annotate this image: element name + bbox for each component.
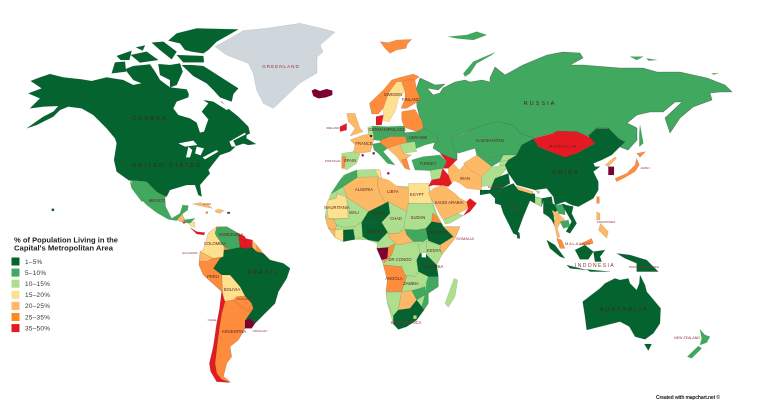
- country: Namibia: [386, 292, 402, 316]
- region: Central and South America: [52, 180, 290, 383]
- country: Cote d'Ivoire: [335, 229, 343, 242]
- country labels: CHILE: [208, 318, 216, 322]
- country labels: JAPAN: [640, 166, 650, 170]
- legend title: % of Population Living in the: [14, 236, 118, 244]
- country: Tanzania: [417, 253, 438, 277]
- region: Asia: [480, 57, 718, 238]
- country: Colombia: [200, 227, 224, 258]
- country: Svalbard: [380, 39, 412, 53]
- country labels: BRAZIL: [247, 270, 279, 276]
- country labels: UNITED STATES: [132, 163, 202, 169]
- country: Iran: [448, 163, 482, 190]
- country: Kenya: [427, 242, 442, 265]
- country labels: ALGERIA: [355, 187, 373, 192]
- country labels: FRANCE: [355, 141, 373, 146]
- country: Saudi Arabia: [428, 185, 468, 220]
- country: Madagascar: [445, 278, 458, 307]
- credit line: Created with mapchart.net ©: [656, 394, 720, 401]
- country: Liberia and Sierra Leone: [328, 228, 336, 238]
- country labels: UKRAINE: [409, 135, 428, 140]
- country: Yemen: [443, 213, 463, 224]
- country: Bhutan: [535, 190, 540, 194]
- country: Vietnam: [562, 204, 577, 233]
- country: Chad: [382, 202, 407, 233]
- country: Mali: [333, 197, 368, 227]
- country labels: EGYPT: [410, 192, 425, 197]
- country: Syria: [430, 168, 443, 180]
- Caribbean islands: [193, 203, 230, 214]
- country: Tajikistan: [499, 160, 508, 166]
- Sakhalin and Russian far-east islands: [630, 57, 718, 147]
- country: India: [495, 183, 553, 235]
- country: Algeria: [343, 177, 388, 212]
- country: Nepal: [517, 186, 533, 194]
- country: Turkmenistan: [463, 155, 492, 177]
- country: Nigeria: [362, 222, 388, 242]
- country: Japan: [615, 152, 646, 182]
- country: Bangladesh: [535, 197, 542, 207]
- Central American countries: [177, 214, 205, 235]
- Africa land base: [325, 169, 460, 329]
- country: Balkans: [387, 144, 412, 168]
- country: Togo and Benin: [353, 222, 363, 239]
- country: Paraguay: [233, 296, 252, 312]
- country labels: ARGENTINA: [222, 329, 246, 334]
- country labels: DR CONGO: [388, 257, 412, 262]
- country: Denmark: [376, 115, 383, 125]
- country: Uganda: [418, 242, 427, 253]
- country: Canada and United States: [27, 74, 256, 197]
- country: Indonesia: [547, 240, 610, 272]
- country: Baltics and Belarus: [402, 109, 423, 132]
- country labels: NIGERIA: [367, 229, 385, 234]
- country: Portugal: [342, 157, 346, 168]
- country: Senegal and Guinea: [325, 217, 337, 230]
- country: Romania: [400, 142, 417, 153]
- country labels: KENYA: [427, 248, 441, 253]
- water: Great Lakes and St Lawrence: [178, 133, 247, 159]
- country: Zimbabwe: [412, 287, 425, 300]
- Baja California: [130, 182, 144, 202]
- country labels: CHINA: [552, 170, 580, 176]
- legend entry 25-35%: 25–35%: [25, 314, 50, 321]
- country labels: PAKISTAN: [488, 185, 502, 189]
- country: Caucasus: [440, 153, 457, 168]
- country labels: INDONESIA: [575, 263, 615, 269]
- country labels: URUGUAY: [253, 329, 267, 333]
- country: Lesotho: [413, 315, 417, 319]
- country: Newfoundland: [233, 134, 247, 146]
- country: China: [505, 128, 625, 207]
- country labels: MALI: [349, 210, 359, 215]
- country labels: POLAND: [388, 127, 406, 132]
- countries: Central Europe: [380, 137, 407, 148]
- country: Finland: [401, 80, 421, 108]
- country: Ukraine: [404, 128, 438, 148]
- legend entry 5-10%: 5–10%: [25, 270, 46, 277]
- country: Benelux: [368, 126, 374, 140]
- country labels: SAUDI ARABIA: [434, 200, 464, 205]
- country: Spain: [342, 152, 360, 170]
- country: New Guinea: [617, 253, 658, 272]
- water: Hudson Bay: [173, 80, 230, 133]
- country: Zambia: [402, 272, 428, 292]
- country labels: PHILIPPINES: [597, 220, 615, 224]
- country labels: SWEDEN: [384, 92, 402, 97]
- legend entry 10-15%: 10–15%: [25, 281, 50, 288]
- country labels: NEW ZEALAND: [674, 336, 700, 340]
- country: New Zealand: [687, 329, 710, 358]
- country: Greece: [402, 158, 410, 170]
- country labels: VENEZUELA: [219, 232, 244, 237]
- country: Germany: [372, 126, 390, 141]
- country labels: CUBA: [203, 202, 211, 206]
- country: South Korea: [608, 167, 614, 175]
- country labels: INDIA: [511, 206, 519, 210]
- country labels: PORTUGAL: [325, 159, 342, 163]
- country labels: MAURITANIA: [324, 205, 350, 210]
- country: Sri Lanka: [517, 232, 520, 238]
- country labels: COLOMBIA: [204, 241, 226, 246]
- country: Tasmania: [644, 344, 652, 351]
- country: Chile: [209, 292, 230, 383]
- country labels: NIGER: [372, 211, 386, 216]
- country labels: ANGOLA: [385, 276, 403, 281]
- country: Greenland: [215, 23, 335, 108]
- country: Iraq: [428, 168, 452, 187]
- country labels: RUSSIA: [524, 101, 556, 107]
- country: Ireland: [340, 123, 347, 132]
- country labels: PAPUA NEW GUINEA: [629, 265, 659, 269]
- country: Tunisia: [375, 170, 382, 185]
- legend entry 15-20%: 15–20%: [25, 292, 50, 299]
- country: Niger: [362, 202, 390, 222]
- South America land base: [199, 227, 290, 382]
- Hawaii: [52, 209, 54, 211]
- country: Laos: [555, 204, 565, 215]
- legend: [12, 236, 118, 332]
- country: Uruguay: [245, 318, 255, 328]
- country: Western Sahara: [327, 192, 337, 205]
- country: Myanmar: [543, 201, 558, 227]
- country: Morocco: [331, 170, 357, 194]
- country: Sweden: [383, 82, 405, 122]
- country: France: [350, 134, 374, 153]
- country labels: MALAYSIA: [565, 241, 591, 246]
- country labels: GREENLAND: [262, 64, 300, 69]
- country: United Kingdom: [347, 113, 363, 136]
- country: Congo: [382, 244, 395, 263]
- country labels: PERU: [207, 274, 219, 279]
- country labels: SOMALIA: [456, 236, 474, 241]
- country: Australia: [583, 275, 661, 339]
- country labels: MEXICO: [149, 198, 166, 203]
- country labels: LIBYA: [387, 189, 399, 194]
- country labels: SPAIN: [344, 158, 356, 163]
- country: Eritrea: [432, 213, 442, 223]
- country labels: TURKEY: [420, 161, 437, 166]
- country: Burkina Faso: [335, 225, 355, 230]
- country: Bolivia: [222, 275, 245, 302]
- country: Brazil: [213, 247, 290, 323]
- country: Afghanistan: [482, 165, 508, 187]
- country: Cambodia: [560, 220, 570, 228]
- country: Ghana: [343, 229, 355, 242]
- country labels: SUDAN: [411, 215, 425, 220]
- country: Venezuela: [215, 227, 240, 249]
- microstate capital markers: [362, 135, 389, 174]
- country: Central African Republic: [388, 229, 413, 245]
- country labels: AUSTRALIA: [599, 307, 649, 313]
- country: Pakistan: [480, 173, 510, 198]
- country: Taiwan: [597, 197, 599, 203]
- country: Mozambique: [422, 277, 438, 310]
- country labels: GERMANY: [368, 127, 390, 132]
- country: Cameroon: [377, 232, 395, 248]
- country: Somalia: [440, 227, 460, 255]
- legend entry 1-5%: 1–5%: [25, 259, 43, 266]
- country labels: ZAMBIA: [403, 281, 419, 286]
- legend entry 20-25%: 20–25%: [25, 303, 50, 310]
- country: Ecuador: [200, 252, 213, 262]
- country: Oman: [463, 198, 477, 216]
- country labels: PARAGUAY: [237, 297, 253, 301]
- country: South Sudan: [405, 228, 428, 242]
- legend entry 35-50%: 35–50%: [25, 325, 50, 332]
- country labels: SOUTH AFRICA: [391, 320, 422, 325]
- country: Ethiopia: [426, 222, 453, 245]
- country: Thailand: [552, 210, 565, 238]
- country: Italy: [373, 143, 395, 165]
- country: Turkey: [412, 155, 447, 171]
- Canadian Arctic islands: [112, 28, 238, 102]
- country: Russia: [416, 52, 732, 160]
- Russian Arctic islands: [448, 32, 495, 77]
- country: Poland: [387, 126, 405, 137]
- country: Sudan: [404, 203, 436, 230]
- country: Uzbekistan: [475, 148, 503, 167]
- country labels: ETHIOPIA: [427, 230, 447, 235]
- country labels: BOLIVIA: [224, 287, 240, 292]
- country: Angola: [383, 265, 407, 292]
- region: Southeast Asia and Oceania: [547, 238, 710, 358]
- country: Argentina: [215, 300, 253, 382]
- water: Lake Victoria: [422, 253, 426, 257]
- Guianas: [238, 233, 257, 252]
- country: Mexico: [128, 180, 188, 221]
- country labels: [132, 64, 700, 340]
- country labels: IRAN: [460, 176, 470, 181]
- country: North Korea: [605, 157, 617, 167]
- country: Egypt: [408, 183, 432, 203]
- country: Peru: [199, 258, 223, 292]
- country: DR Congo: [383, 242, 420, 277]
- country: Iceland: [312, 89, 332, 98]
- country: Kyrgyzstan: [500, 155, 517, 162]
- country: Mongolia: [533, 131, 595, 157]
- country labels: CANADA: [132, 116, 168, 122]
- country: Gabon: [377, 247, 388, 260]
- region: North America: [27, 23, 335, 197]
- region: Africa and Arabia: [325, 169, 477, 329]
- country: Philippines: [597, 212, 608, 238]
- country labels: FINLAND: [402, 97, 420, 102]
- country: Libya: [377, 177, 408, 212]
- legend title: [14, 236, 118, 252]
- country: Norway: [369, 74, 419, 114]
- country labels: CHAD: [390, 216, 402, 221]
- country labels: MONGOLIA: [549, 144, 577, 148]
- country: South Africa: [393, 300, 424, 329]
- country labels: KAZAKHSTAN: [476, 138, 504, 143]
- country labels: IRELAND: [326, 126, 340, 130]
- country labels: ECUADOR: [182, 251, 198, 255]
- country: Malaysia: [557, 238, 593, 248]
- legend title: Capital's Metropolitan Area: [14, 244, 114, 252]
- country: Kazakhstan: [452, 122, 533, 158]
- country: Mauritania: [327, 194, 348, 218]
- country labels: TANZANIA: [423, 264, 443, 269]
- region: Europe and Central Asia: [312, 32, 533, 190]
- country: Botswana: [398, 291, 417, 310]
